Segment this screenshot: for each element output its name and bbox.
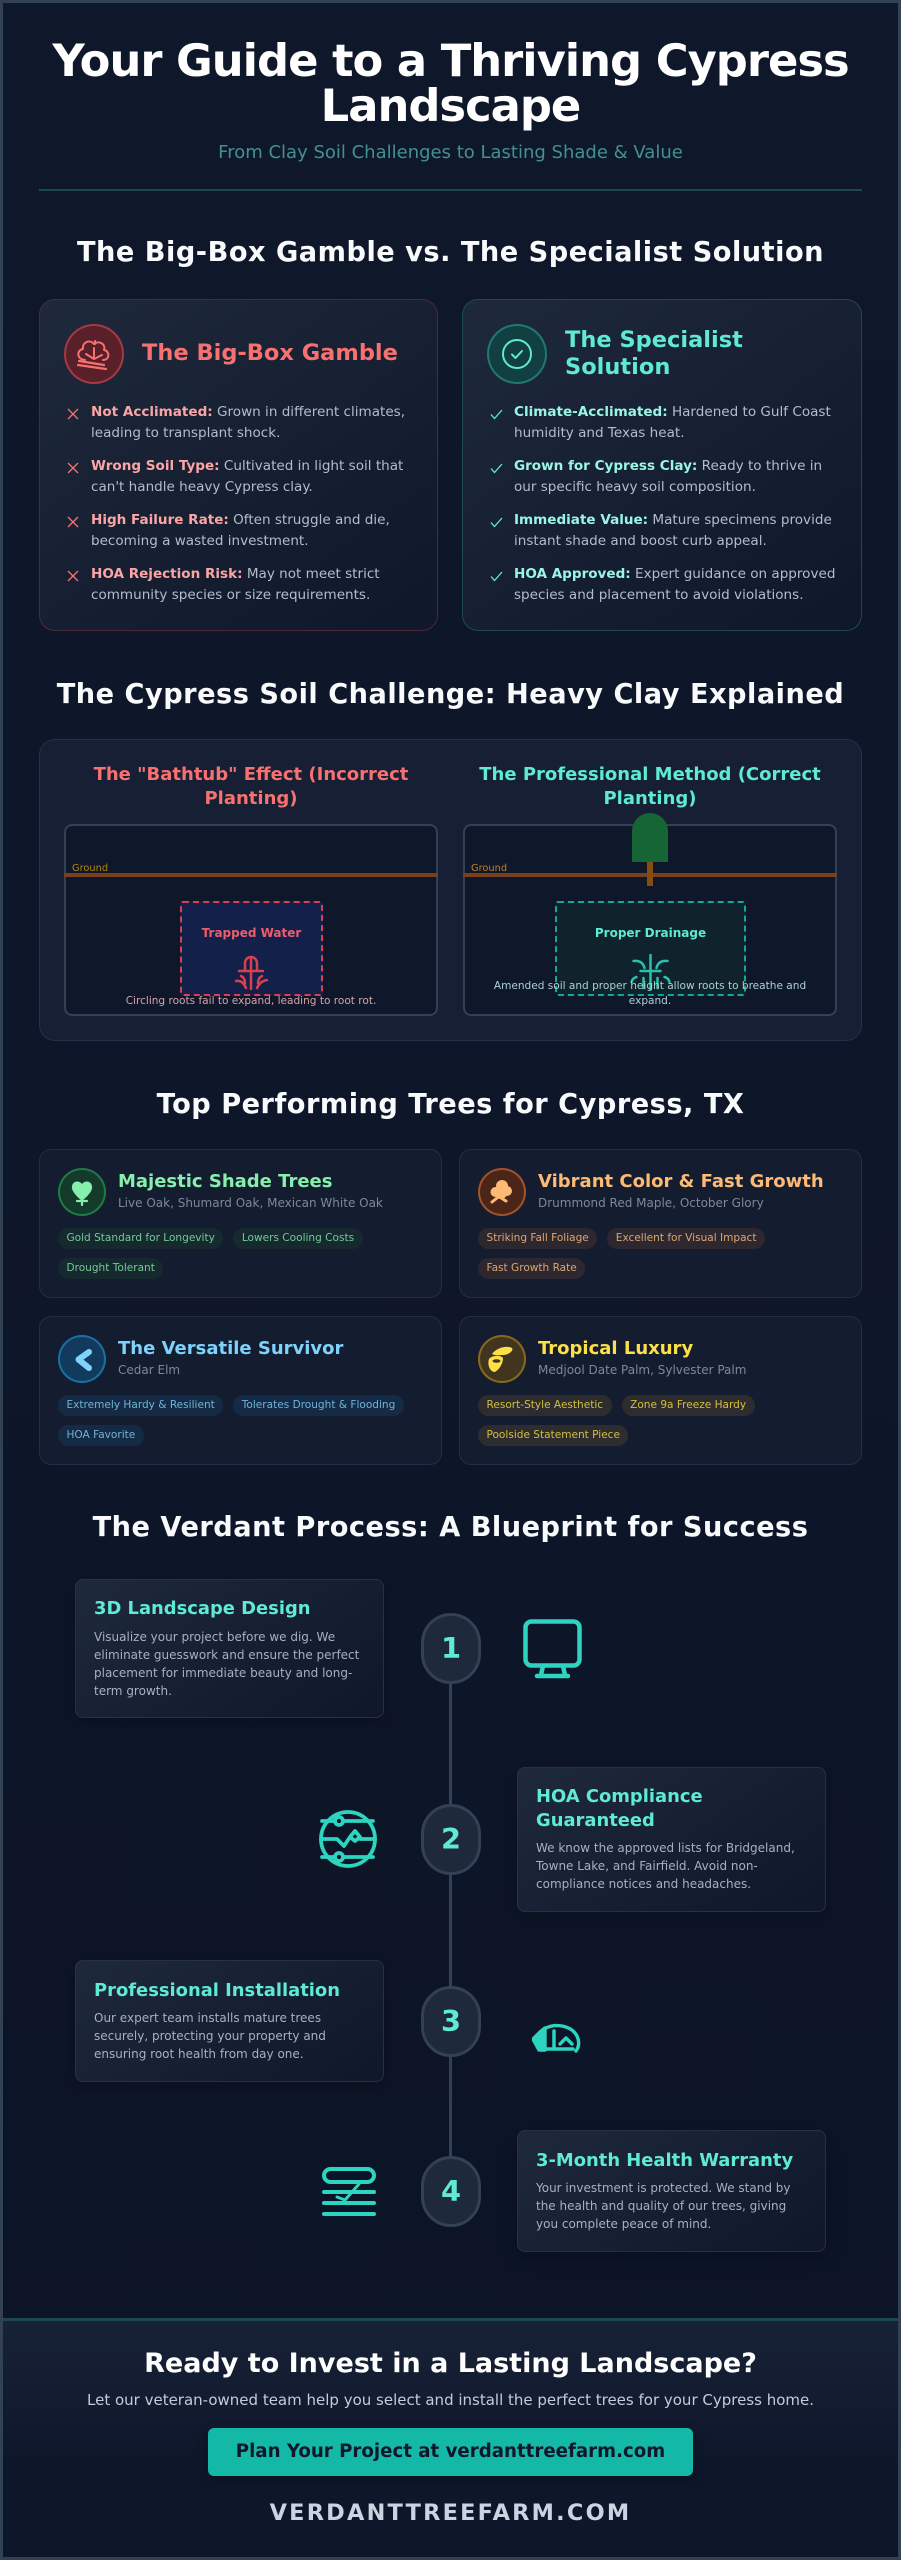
heading: verdant process: The Verdant Process: A Blueprint for Success xyxy=(93,1512,808,1543)
step title: Professional Installation xyxy=(94,1980,340,2001)
panel: versatile survivor xyxy=(39,1316,442,1465)
step text: We know the approved lists for Bridgeland, xyxy=(536,1841,795,1855)
subtitle: From Clay Soil Challenges to Lasting Shade & Value xyxy=(218,142,683,163)
card title: Majestic Shade Trees xyxy=(118,1171,332,1192)
list item: hoa approved: HOA Approved: Expert guidance on approved xyxy=(514,566,835,582)
tags: Extremely Hardy & Resilient xyxy=(66,1399,215,1411)
tags xyxy=(58,1228,363,1279)
step text: securely, protecting your property and xyxy=(94,2029,326,2043)
footer panel xyxy=(0,2318,901,2560)
step text: ensuring root health from day one. xyxy=(94,2047,304,2061)
step text: term growth. xyxy=(94,1684,172,1698)
footer heading: Ready to Invest in a Lasting Landscape? xyxy=(144,2348,757,2379)
icon: circuit globe xyxy=(319,1810,377,1868)
step 1 number: 1 xyxy=(441,1631,461,1665)
tags: Drought Tolerant xyxy=(66,1262,155,1274)
list item: grown for cypress clay: our specific heavy soil composition. xyxy=(514,479,756,495)
step 2 card xyxy=(517,1767,826,1912)
icon: cloud in red circle xyxy=(64,324,124,384)
step 3 number: 3 xyxy=(441,2004,461,2038)
panel: vibrant color and fast growth xyxy=(459,1149,862,1298)
list item: not acclimated xyxy=(68,404,405,441)
proper drainage box xyxy=(555,901,746,996)
icon: house and tree xyxy=(532,2024,580,2053)
heading: soil challenge: The Cypress Soil Challenge: Heavy Clay Explained xyxy=(57,679,844,710)
list item: high failure rate xyxy=(68,512,390,549)
subheading: professional method xyxy=(479,764,821,809)
tags: Gold Standard for Longevity xyxy=(66,1232,215,1244)
icon: chevron xyxy=(58,1335,106,1383)
timeline line xyxy=(449,1684,452,2156)
step text xyxy=(536,1841,795,1891)
tags: HOA Favorite xyxy=(66,1429,135,1441)
step 4 number xyxy=(421,2156,481,2227)
list item: grown for cypress clay: Grown for Cypress Clay: Ready to thrive in xyxy=(514,458,822,474)
step title: 3-Month Health Warranty xyxy=(536,2150,793,2171)
subheading: professional method: Planting) xyxy=(603,788,697,809)
icon: maple xyxy=(478,1168,526,1216)
tags: Resort-Style Aesthetic xyxy=(486,1399,603,1411)
step 1 card xyxy=(75,1579,384,1718)
icon: check in teal circle xyxy=(487,324,547,384)
tags: Excellent for Visual Impact xyxy=(616,1232,756,1244)
step text: Towne Lake, and Fairfield. Avoid non- xyxy=(536,1859,758,1873)
step title: HOA Compliance xyxy=(536,1786,703,1807)
icon: checklist xyxy=(322,2167,376,2216)
panel title xyxy=(565,326,743,380)
step text: you complete peace of mind. xyxy=(536,2217,711,2231)
tags xyxy=(478,1395,755,1446)
call to action button: Plan Your Project at verdanttreefarm.com xyxy=(236,2441,665,2462)
list item: high failure rate: High Failure Rate: Often struggle and die, xyxy=(91,512,390,528)
panel title: The Specialist xyxy=(565,326,743,352)
species: Cedar Elm xyxy=(118,1363,180,1377)
header divider xyxy=(39,189,862,191)
panel: the specialist solution xyxy=(462,299,862,631)
ground label: Ground xyxy=(471,863,507,874)
species: Medjool Date Palm, Sylvester Palm xyxy=(538,1363,746,1377)
tags xyxy=(58,1395,404,1446)
list item: hoa rejection risk: community species or size requirements. xyxy=(91,587,370,603)
step text: compliance notices and headaches. xyxy=(536,1877,751,1891)
species: Live Oak, Shumard Oak, Mexican White Oak xyxy=(118,1196,383,1210)
brand url: VERDANTTREEFARM.COM xyxy=(270,2500,631,2526)
list item: hoa rejection risk: HOA Rejection Risk: May not meet strict xyxy=(91,566,380,582)
step 1 number xyxy=(421,1613,481,1684)
list item: grown for cypress clay xyxy=(490,458,822,495)
list item: immediate value xyxy=(490,512,832,549)
footer text: Let our veteran-owned team help you select and install the perfect trees for your Cypress home. xyxy=(87,2391,814,2409)
list item: hoa approved: species and placement to avoid violations. xyxy=(514,587,804,603)
step 2 number xyxy=(421,1804,481,1875)
tags: Poolside Statement Piece xyxy=(486,1429,620,1441)
list item: climate-acclimated: humidity and Texas heat. xyxy=(514,425,685,441)
list item: high failure rate: becoming a wasted investment. xyxy=(91,533,309,549)
step 4 card xyxy=(517,2130,826,2252)
panel title: The Big-Box Gamble xyxy=(142,340,398,366)
step 4 number: 4 xyxy=(441,2174,461,2208)
heading: top trees: Top Performing Trees for Cypress, TX xyxy=(157,1089,744,1120)
title: Landscape xyxy=(321,79,580,132)
list item: wrong soil type: Wrong Soil Type: Cultivated in light soil that xyxy=(91,458,403,474)
step text: placement for immediate beauty and long- xyxy=(94,1666,352,1680)
step 3 number xyxy=(421,1986,481,2057)
panel: majestic shade trees xyxy=(39,1149,442,1298)
panel: soil diagrams xyxy=(39,739,862,1041)
step title: Guaranteed xyxy=(536,1810,655,1831)
step title: 3D Landscape Design xyxy=(94,1598,311,1619)
proper drainage box: Proper Drainage xyxy=(595,926,706,940)
caption: expand. xyxy=(629,995,671,1007)
card title: Tropical Luxury xyxy=(538,1338,693,1359)
subheading: bathtub effect xyxy=(94,764,408,809)
list item: not acclimated: Not Acclimated: Grown in different climates, xyxy=(91,404,405,420)
card title: The Versatile Survivor xyxy=(118,1338,343,1359)
tags: Lowers Cooling Costs xyxy=(242,1232,354,1244)
step 3 card xyxy=(75,1960,384,2082)
caption: Circling roots fail to expand, leading to root rot. xyxy=(126,995,376,1007)
tags: Tolerates Drought & Flooding xyxy=(242,1399,395,1411)
diagram: incorrect planting xyxy=(64,824,438,1016)
tags xyxy=(478,1228,765,1279)
list item: not acclimated: leading to transplant shock. xyxy=(91,425,280,441)
subheading: bathtub effect: The "Bathtub" Effect (Incorrect xyxy=(94,764,408,785)
list item: hoa approved xyxy=(490,566,835,603)
icon: shade tree xyxy=(58,1168,106,1216)
step text xyxy=(536,2181,790,2231)
species: Drummond Red Maple, October Glory xyxy=(538,1196,764,1210)
icon: palm xyxy=(478,1335,526,1383)
caption xyxy=(494,980,806,1007)
step text xyxy=(94,2011,326,2061)
diagram: correct planting xyxy=(463,824,837,1016)
tags: Fast Growth Rate xyxy=(486,1262,577,1274)
list item: hoa rejection risk xyxy=(68,566,380,603)
title xyxy=(52,34,849,132)
list item: immediate value: instant shade and boost curb appeal. xyxy=(514,533,767,549)
panel title: Solution xyxy=(565,354,670,380)
panel: tropical luxury xyxy=(459,1316,862,1465)
tags: Striking Fall Foliage xyxy=(486,1232,589,1244)
panel: the big-box gamble xyxy=(39,299,438,631)
step text: Visualize your project before we dig. We xyxy=(94,1630,335,1644)
step text: the health and quality of our trees, giving xyxy=(536,2199,786,2213)
step text: Our expert team installs mature trees xyxy=(94,2011,321,2025)
trapped water box xyxy=(180,901,323,996)
step 2 number: 2 xyxy=(441,1822,461,1856)
icon: circling roots xyxy=(235,956,268,990)
icon: healthy roots xyxy=(630,954,671,990)
subheading: bathtub effect: Planting) xyxy=(204,788,298,809)
tags: Zone 9a Freeze Hardy xyxy=(630,1399,746,1411)
step text: eliminate guesswork and ensure the perfect xyxy=(94,1648,359,1662)
tree xyxy=(632,813,668,886)
title: Your Guide to a Thriving Cypress xyxy=(52,34,849,87)
list item: wrong soil type: can't handle heavy Cypress clay. xyxy=(91,479,313,495)
list item: climate-acclimated xyxy=(490,404,831,441)
list item: immediate value: Immediate Value: Mature specimens provide xyxy=(514,512,832,528)
step text xyxy=(94,1630,360,1698)
heading: big-box vs specialist: The Big-Box Gamble vs. The Specialist Solution xyxy=(77,237,824,268)
step title xyxy=(536,1786,703,1831)
icon: monitor xyxy=(523,1619,582,1678)
card title: Vibrant Color & Fast Growth xyxy=(538,1171,824,1192)
list item: wrong soil type xyxy=(68,458,403,495)
list item: climate-acclimated: Climate-Acclimated: Hardened to Gulf Coast xyxy=(514,404,831,420)
step text: Your investment is protected. We stand by xyxy=(536,2181,790,2195)
caption: Amended soil and proper height allow roots to breathe and xyxy=(494,980,806,992)
ground label: Ground xyxy=(72,863,108,874)
trapped water box: Trapped Water xyxy=(202,926,301,940)
subheading: professional method: The Professional Method (Correct xyxy=(479,764,821,785)
call to action button xyxy=(208,2428,693,2476)
